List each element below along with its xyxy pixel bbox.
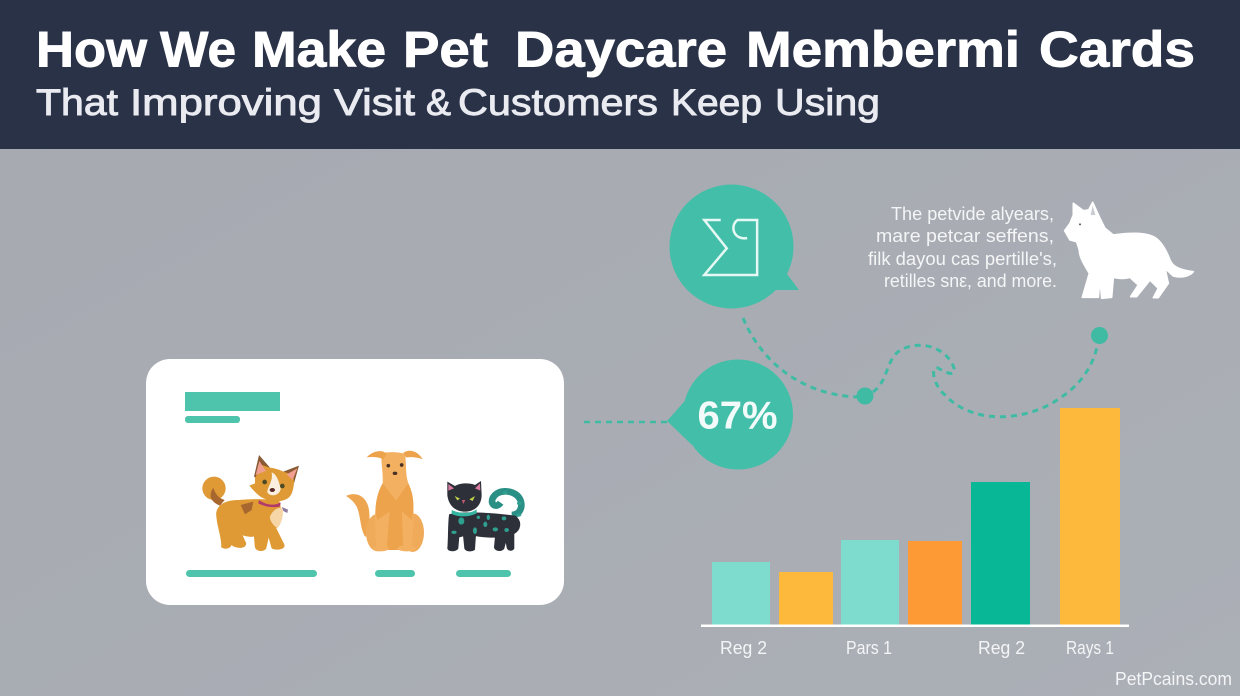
subtitle: Using: [775, 81, 880, 123]
icon: sigma glyph: [704, 220, 757, 275]
chart axis: [701, 624, 1129, 627]
dashed connector: card to 67% bubble: [584, 421, 668, 423]
panel: membership card: [146, 359, 564, 605]
title: We: [160, 22, 236, 78]
title: How: [36, 22, 147, 78]
text block: description: filk dayou cas pertille's,: [868, 249, 1057, 269]
subtitle: That: [36, 81, 119, 123]
subtitle: Visit: [334, 81, 416, 123]
text block: description: mare petcar seffens,: [876, 226, 1054, 246]
subtitle: Keep: [671, 81, 762, 123]
axis labels: [720, 638, 1114, 658]
subtitle: Improving: [130, 81, 322, 123]
icon: white dog silhouette: [1065, 202, 1193, 298]
caption bar: dog 1: [186, 570, 317, 577]
icon: sitting dog: [346, 451, 424, 552]
subtitle: &: [426, 81, 451, 123]
bar 2: [779, 572, 833, 625]
title: Pet: [403, 22, 488, 78]
bar 6: [1060, 408, 1120, 625]
icon: orange dog: [202, 455, 299, 550]
title: Daycare: [515, 22, 727, 78]
bar 3: [841, 540, 899, 625]
speech bubble: sigma icon: [670, 184, 799, 308]
caption bar: cat: [456, 570, 511, 577]
title: Make: [252, 22, 386, 78]
title: [36, 22, 1195, 78]
axis labels: Reg 2: [978, 638, 1025, 658]
bar 1: [712, 562, 770, 625]
caption bar: dog 2: [375, 570, 415, 577]
text block: description: [868, 204, 1057, 291]
speech bubble: 67%: [667, 360, 793, 470]
dashed curve: timeline: [743, 318, 1108, 417]
timeline dot 2: [1091, 327, 1108, 344]
stat: 67%: 67%: [698, 394, 778, 438]
subtitle: Customers: [458, 81, 658, 123]
axis labels: Pars 1: [846, 638, 892, 658]
timeline dot 1: [856, 388, 874, 404]
axis labels: Rays 1: [1066, 638, 1114, 658]
icon: black spotted cat: [447, 481, 522, 550]
card subheading bar: [185, 416, 240, 423]
bar 4: [908, 541, 962, 625]
axis labels: Reg 2: [720, 638, 767, 658]
card heading bar: [185, 392, 280, 411]
title: Membermi: [746, 22, 1020, 78]
subtitle: [36, 81, 880, 123]
bar 5: [971, 482, 1030, 625]
text block: description: retilles snε, and more.: [884, 271, 1057, 291]
bar chart: [701, 408, 1129, 658]
footer watermark: PetPcains.com: [1115, 669, 1232, 689]
header banner: [0, 0, 1240, 149]
text block: description: The petvide alyears,: [891, 204, 1054, 224]
title: Cards: [1039, 22, 1195, 78]
